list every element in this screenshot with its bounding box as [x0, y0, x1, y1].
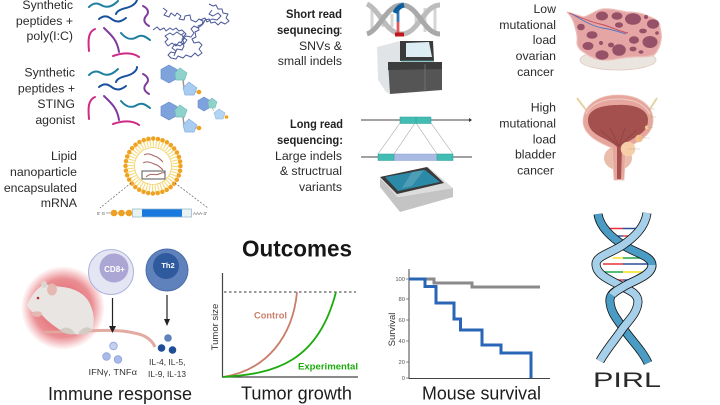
label: interleukins: IL-9, IL-13	[148, 370, 186, 379]
chart: mouse survival: Survival	[387, 313, 398, 346]
icon: IFN cytokines	[103, 342, 122, 363]
label: high mutational load bladder cancer: load	[533, 132, 556, 146]
chart: mouse survival: 100	[395, 277, 405, 283]
chart: mouse survival: 20	[399, 360, 405, 366]
chart: mouse survival	[387, 269, 550, 382]
label: synthetic peptides + STING agonist: peptides +	[18, 82, 75, 96]
icon: DNA double helix	[367, 4, 440, 34]
label: short read sequencing: sequnecing	[277, 23, 340, 37]
chart: mouse survival: 80	[399, 297, 405, 303]
label: long read sequencing	[275, 117, 343, 194]
diagram: long read alignment	[361, 117, 472, 160]
icon: bladder	[577, 95, 657, 180]
logo: PIRL DNA ribbon: PIRL	[593, 369, 661, 392]
label: low mutational load ovarian cancer: load	[533, 33, 556, 47]
label: synthetic peptides + STING agonist: Synthetic	[24, 66, 75, 80]
chart: tumor growth: Experimental	[298, 362, 358, 372]
label: synthetic peptides + poly(I:C): poly(I:C)	[27, 29, 73, 43]
icon: mRNA construct: 5' G	[97, 211, 106, 216]
label: long read sequencing: Large indels	[275, 149, 342, 163]
label: lipid nanoparticle encapsulated mRNA: encapsulated	[4, 181, 77, 195]
heading: tumor growth: Tumor growth	[241, 382, 352, 404]
label: synthetic peptides + STING agonist: STING	[37, 97, 75, 111]
label: synthetic peptides + poly(I:C): peptides +	[16, 14, 73, 28]
heading: immune response: Immune response	[48, 383, 192, 404]
label: interleukins: IL-4, IL-5,	[149, 358, 186, 367]
label: short read sequencing: SNVs &	[299, 39, 343, 53]
label: short read sequencing: :	[339, 23, 342, 37]
icon: interleukin cytokines	[158, 334, 176, 354]
arrow: CD8+ to cytokines	[109, 298, 116, 333]
arrow: Th2 to cytokines	[164, 295, 170, 326]
icon: Th2 cell: Th2	[161, 261, 175, 270]
icon: Th2 cell	[146, 249, 188, 291]
label: high mutational load bladder cancer: cancer	[517, 164, 554, 178]
label: high mutational load bladder cancer: bladder	[515, 148, 556, 162]
icon: STING agonist molecule two	[161, 102, 201, 132]
icon: lipid nanoparticle	[126, 138, 180, 194]
label: low mutational load ovarian cancer: ovarian	[516, 49, 556, 63]
label: long read sequencing: variants	[299, 180, 342, 194]
label: IFNγ, TNFα: IFNγ, TNFα	[88, 367, 137, 377]
logo: PIRL DNA ribbon	[593, 213, 661, 392]
label: low mutational load ovarian cancer: mutational	[499, 18, 556, 32]
chart: mouse survival: 40	[399, 339, 405, 345]
label: short read sequencing	[277, 7, 343, 68]
label: short read sequencing: small indels	[278, 54, 342, 68]
icon: mRNA construct: AAA-3'	[193, 211, 207, 216]
label: long read sequencing: & structrual	[280, 164, 342, 178]
icon: short read sequencer	[377, 41, 442, 94]
icon: STING agonist molecule three	[198, 97, 228, 119]
label: lipid nanoparticle encapsulated mRNA: Lipid	[51, 149, 77, 163]
icon: long read sequencer	[380, 167, 453, 212]
icon: CD8+ cell	[88, 250, 134, 294]
label: high mutational load bladder cancer: High	[531, 100, 556, 114]
icon: STING agonist molecule one	[161, 65, 201, 95]
icon: peptides group two	[89, 67, 150, 125]
icon: CD8+ cell: CD8+	[104, 265, 125, 274]
chart: mouse survival: 0	[402, 376, 405, 382]
label: lipid nanoparticle encapsulated mRNA: mRNA	[41, 196, 78, 210]
label: short read sequencing: Short read	[286, 7, 342, 21]
label: long read sequencing: Long read	[290, 117, 343, 131]
label: high mutational load bladder cancer: mutational	[499, 116, 556, 130]
label: low mutational load ovarian cancer: cancer	[517, 65, 554, 79]
heading: mouse survival: Mouse survival	[422, 382, 541, 404]
icon: ovary	[567, 9, 661, 70]
label: long read sequencing: sequencing:	[277, 133, 343, 147]
label: interleukins	[148, 358, 186, 379]
chart: tumor growth	[210, 273, 358, 377]
label: lipid nanoparticle encapsulated mRNA: nanoparticle	[10, 165, 77, 179]
chart: tumor growth: Control	[254, 310, 287, 320]
icon: peptides group one	[89, 0, 150, 57]
icon: mouse with tumor glow	[21, 266, 155, 350]
heading: outcomes: Outcomes	[242, 236, 352, 262]
chart: tumor growth: Tumor size	[210, 304, 221, 350]
label: low mutational load ovarian cancer: Low	[533, 2, 556, 16]
icon: mRNA construct	[97, 183, 208, 217]
label: synthetic peptides + STING agonist: agonist	[35, 113, 76, 127]
icon: poly(I:C) strands	[153, 4, 229, 59]
chart: mouse survival: 60	[399, 318, 405, 324]
